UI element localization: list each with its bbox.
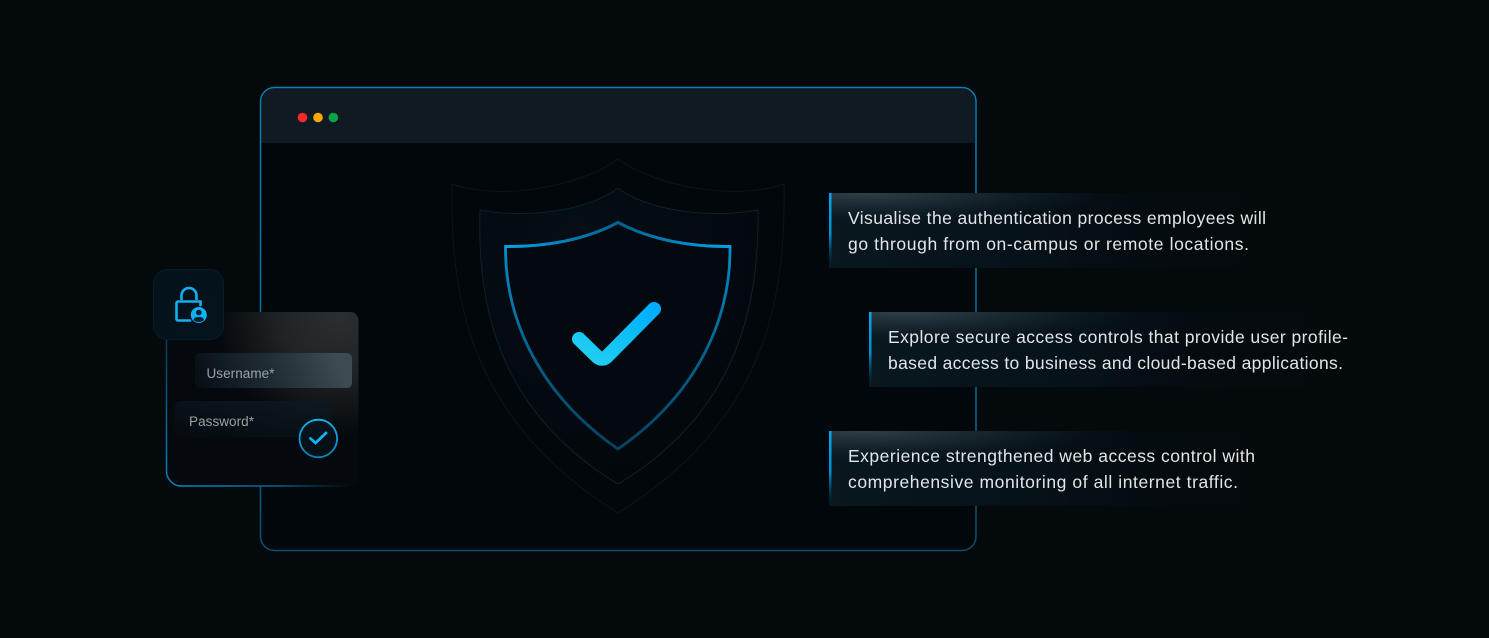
password field: Password*: [189, 414, 255, 429]
callout: authentication: [829, 193, 1299, 268]
icon: lock with user: [176, 288, 207, 323]
callout: web access control: comprehensive monitoring of all internet traffic.: [848, 472, 1238, 492]
window title bar: [262, 88, 975, 143]
shield top edge: [505, 222, 731, 247]
window control dots: [298, 113, 338, 122]
lock tile: [154, 270, 224, 340]
shield middle outline: [480, 188, 758, 484]
callout: access controls: [869, 312, 1369, 387]
icon: check circle: [300, 420, 337, 457]
card body: [166, 312, 359, 486]
login card: [166, 312, 359, 486]
callout: access controls: based access to business and cloud-based applications.: [888, 353, 1343, 373]
shield inner outline: [505, 222, 730, 449]
shield outer outline: [452, 159, 784, 513]
callout: authentication: Visualise the authentication process employees will: [848, 208, 1266, 228]
browser window: [260, 88, 976, 550]
shield: [452, 159, 784, 513]
callout: authentication: go through from on-campus or remote locations.: [848, 234, 1249, 254]
username field: [195, 353, 352, 388]
callout: web access control: Experience strengthened web access control with: [848, 446, 1255, 466]
callout: access controls: Explore secure access controls that provide user profile-: [888, 327, 1348, 347]
password field: [175, 401, 332, 437]
callout: web access control: [829, 431, 1299, 506]
icon: check mark: [579, 309, 654, 359]
username field: Username*: [206, 366, 275, 381]
